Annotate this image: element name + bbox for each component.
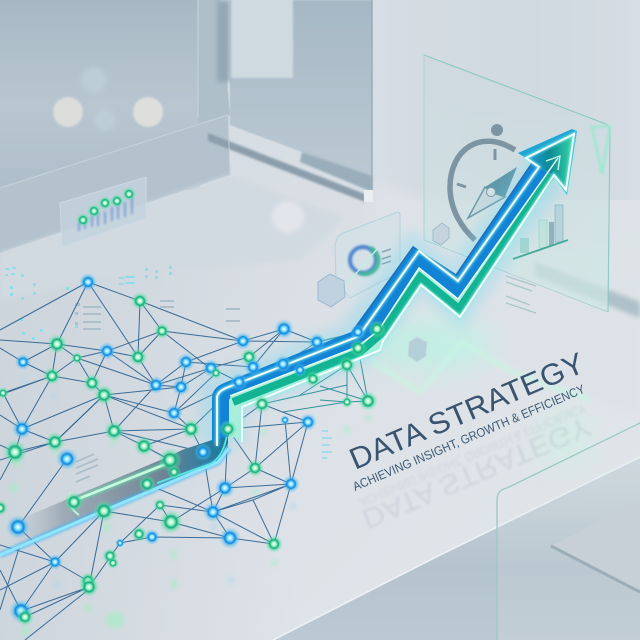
arrowhead	[518, 129, 577, 195]
blue band	[212, 163, 560, 442]
table front edge and lower shelf	[273, 457, 640, 640]
data readouts on the floor	[5, 266, 332, 482]
icons: hexagons	[318, 223, 449, 307]
main growth arrow	[0, 129, 577, 555]
icon: bar chart	[506, 205, 568, 313]
reflection of the title: ACHIEVING INSIGHT, GROWTH & EFFICIENCY	[357, 400, 588, 509]
glass panel: donut chart	[335, 212, 400, 298]
foreground glass panel	[497, 423, 640, 640]
bright edge lines	[217, 134, 574, 446]
reflection of the title: DATA STRATEGY	[358, 411, 596, 535]
lower dark band	[0, 425, 228, 555]
arrow glow	[222, 165, 550, 445]
network: connecting lines	[0, 282, 377, 640]
aluminium rails	[0, 0, 640, 318]
subtitle: ACHIEVING INSIGHT, GROWTH & EFFICIENCY	[351, 382, 587, 494]
floor reflections and glow	[9, 321, 593, 636]
title: DATA STRATEGY	[345, 347, 589, 476]
glass panel: mini bar chart	[60, 177, 146, 247]
green band	[229, 158, 558, 440]
glass panel: arrow backdrop	[424, 55, 610, 312]
icon: stopwatch compass	[450, 124, 517, 240]
network: nodes	[0, 273, 386, 626]
